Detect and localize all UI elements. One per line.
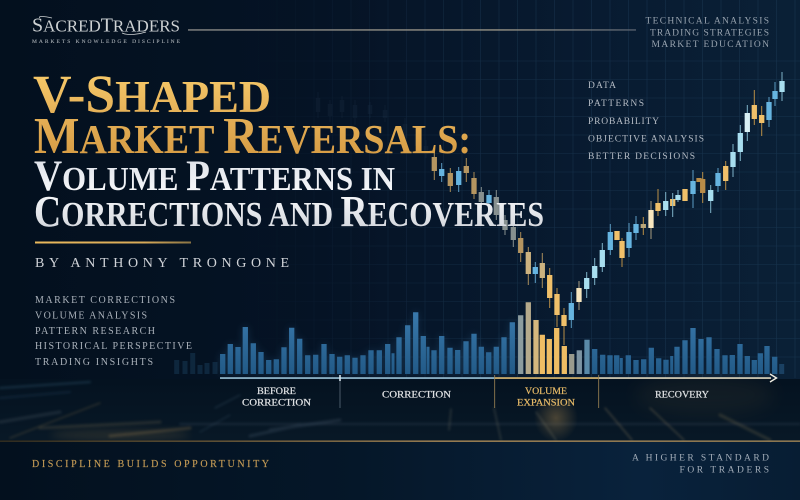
timeline axis <box>220 374 776 408</box>
top right tags <box>646 16 769 50</box>
title line: silver <box>34 153 544 236</box>
right list: OBJECTIVE ANALYSIS <box>588 134 704 144</box>
title line: silver: VOLUME PATTERNS IN <box>34 153 395 200</box>
title line: silver: CORRECTIONS AND RECOVERIES <box>34 187 544 236</box>
phase label: before correction: BEFORE <box>257 387 296 397</box>
right list: BETTER DECISIONS <box>588 152 695 162</box>
logo: SACREDTRADERS <box>32 14 180 36</box>
top right tags: TRADING STRATEGIES <box>650 28 769 38</box>
top rule <box>188 29 636 31</box>
title <box>33 64 544 236</box>
floor reflection <box>0 375 800 442</box>
tan candles <box>434 153 658 262</box>
logo: MARKETS KNOWLEDGE DISCIPLINE <box>32 39 181 45</box>
right list: PATTERNS <box>588 99 644 109</box>
phase label: volume expansion: EXPANSION <box>517 398 575 408</box>
byline: BY ANTHONY TRONGONE <box>35 256 289 271</box>
left list: TRADING INSIGHTS <box>35 357 153 368</box>
left list: PATTERN RESEARCH <box>35 326 155 337</box>
blue bars <box>223 312 775 374</box>
logo swoosh <box>39 16 146 35</box>
light blue candles <box>587 72 782 298</box>
title underline <box>35 242 191 244</box>
volume bar chart <box>177 302 782 374</box>
footer right text <box>632 454 769 476</box>
title line: gold <box>33 64 471 165</box>
chart grid <box>350 0 800 378</box>
title line: gold: V-SHAPED <box>33 64 271 124</box>
blue candles <box>442 82 775 328</box>
grey candles <box>481 187 513 247</box>
footer band <box>0 442 800 500</box>
left list <box>35 295 192 368</box>
phase label: correction: CORRECTION <box>382 391 451 401</box>
right list: PROBABILITY <box>588 117 659 127</box>
top right tags: TECHNICAL ANALYSIS <box>646 16 769 26</box>
footer divider <box>0 440 800 442</box>
axis arrow <box>770 374 776 382</box>
left list: MARKET CORRECTIONS <box>35 295 175 306</box>
footer tagline: DISCIPLINE BUILDS OPPORTUNITY <box>32 459 269 470</box>
top right tags: MARKET EDUCATION <box>652 40 769 50</box>
gold candles <box>550 90 762 345</box>
right list: DATA <box>588 81 616 91</box>
title line: gold: MARKET REVERSALS: <box>34 108 471 165</box>
left list: HISTORICAL PERSPECTIVE <box>35 341 192 352</box>
candlestick chart <box>318 72 782 345</box>
phase label: before correction <box>242 387 311 408</box>
tan-cream candles <box>528 247 542 288</box>
axis dividers <box>339 375 341 408</box>
cream candles <box>579 201 651 310</box>
faded lead-in bars <box>177 353 215 374</box>
phase label: before correction: CORRECTION <box>242 398 311 408</box>
left list: VOLUME ANALYSIS <box>35 310 147 322</box>
right list <box>588 81 704 162</box>
gold bars <box>542 328 564 374</box>
phase label: volume expansion: VOLUME <box>525 387 567 397</box>
footer right text: A HIGHER STANDARD <box>632 454 769 464</box>
footer right text: FOR TRADERS <box>680 466 769 476</box>
phase label: volume expansion <box>517 387 575 408</box>
phase label: recovery: RECOVERY <box>655 391 709 401</box>
faint early candles <box>318 92 426 158</box>
transition bars <box>518 315 523 374</box>
